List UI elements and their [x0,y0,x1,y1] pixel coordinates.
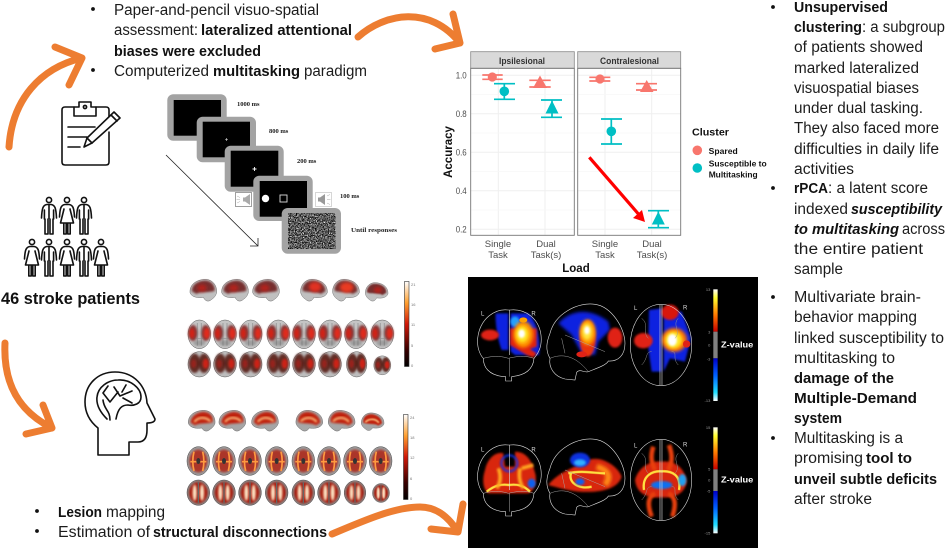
text block: brain-behaviour findings: unveil subtle deficits [794,471,937,488]
brain map: lesion Z-values [478,287,754,403]
view labels [481,305,688,317]
Z-value colour bar: -3 [707,356,711,361]
stimulus frame 1 [167,94,227,141]
text block: clustering and rPCA findings: clustering [794,19,862,36]
diagram: multitasking paradigm [166,94,397,254]
view labels [481,443,688,453]
colour bar: 5 [411,343,414,348]
y-axis ticks: 0.2 [456,224,467,236]
arrow: assessment to behavioural results [358,14,460,49]
view labels: R [531,311,536,317]
text block: brain-behaviour findings: linked susceptibility to [794,330,944,347]
text block: clustering and rPCA findings: : a latent score [828,180,928,197]
view labels: R [531,447,536,453]
y-axis ticks [456,70,467,236]
view labels: R [683,305,688,311]
x-axis ticks: Task(s) [531,250,561,261]
stimulus frame 5: noise mask [282,208,341,254]
arrow: patients to lesion mapping [5,343,52,434]
text block: brain-behaviour findings: multitasking to [794,350,895,367]
text block: clustering and rPCA findings: across [902,221,945,238]
text block: behavioural assessment bullets [91,2,367,80]
brain map: disconnection Z-values [478,425,754,536]
x-axis ticks: Task [595,250,615,261]
text block: clustering and rPCA findings: difficulties in daily life [794,141,939,158]
colour bar: 11 [411,322,416,327]
sagittal and axial slices [187,410,392,505]
view labels: L [634,306,638,312]
colour bar: 0 [410,496,413,501]
stimulus frame 3 [225,146,284,192]
panel headers [471,52,681,68]
colour bar: 21 [411,282,416,287]
icon: head with brain [85,372,155,455]
Z-value colour bar: 0 [708,343,711,348]
y-axis ticks: 0.8 [456,109,467,120]
timing labels: 100 ms [340,193,360,200]
text block: behavioural assessment bullets: Computerized [114,63,209,80]
x-axis ticks: Dual [642,239,662,250]
colour bar: 18 [410,435,415,440]
icon: speaker right [316,192,332,206]
axis titles [443,126,590,275]
text block: clustering and rPCA findings: indexed [794,201,848,218]
Z-value colour bar: Z-value [721,340,754,350]
timing labels: 800 ms [269,128,289,135]
arrow: patients to assessment [9,47,82,147]
y-axis ticks: 0.4 [456,186,467,197]
Z-value colour bar: Z-value [721,475,754,485]
icon: speaker left [236,192,252,206]
text block: brain-behaviour findings [771,289,944,508]
text block: brain-behaviour findings: tool to [866,450,912,467]
text block: brain-behaviour findings: Multitasking is a [794,430,903,447]
coronal, sagittal and axial activations [481,305,691,372]
x-axis ticks: Task [488,250,508,261]
chart: accuracy by load and cluster [443,52,767,275]
text block: behavioural assessment bullets: Paper-and-pencil visuo-spatial [114,2,319,19]
colour bar: 6 [410,476,413,481]
Z-value colour bar [705,425,754,536]
text block: lesion mapping bullets: structural disconnections [153,524,327,541]
text block: clustering and rPCA findings: rPCA [794,180,828,197]
legend: Multitasking [709,170,758,180]
text block: clustering and rPCA findings: susceptibility [851,201,943,218]
Z-value colour bar: -5 [707,488,711,493]
view labels: R [683,443,688,449]
text block: lesion mapping bullets: mapping [106,504,165,521]
axis titles: Accuracy [443,126,455,178]
text block: behavioural assessment bullets: multitasking [213,63,300,80]
view labels: L [481,311,485,317]
timing labels: Until responses [351,227,397,234]
brain maps: lesion overlap [188,279,416,377]
text block: clustering and rPCA findings: to multitasking [794,221,900,238]
text block: clustering and rPCA findings: activities [794,161,854,178]
text block: brain-behaviour findings: Multiple-Demand [794,390,917,407]
x-axis ticks: Dual [536,239,556,250]
stimulus frame 2 [197,117,256,162]
text block: brain-behaviour findings: damage of the [794,370,894,387]
x-axis ticks: Single [485,239,511,250]
colour bar [404,282,416,368]
legend [692,127,767,180]
y-axis ticks: 1.0 [456,70,467,82]
text block: clustering and rPCA findings: under dual tasking. [794,100,923,117]
text block: brain-behaviour findings: after stroke [794,491,872,508]
text block: lesion mapping bullets [35,504,327,541]
text block: behavioural assessment bullets: paradigm [304,63,367,80]
stimulus frame 4 [253,176,313,221]
series: susceptible to multitasking [494,84,669,228]
axis titles: Load [562,263,590,275]
brain maps: structural disconnection [187,410,415,505]
series: spared [482,72,657,92]
arrow: red decline [589,157,645,222]
text block: clustering and rPCA findings: visuospatial biases [794,80,919,97]
Z-value colour bar: 13 [706,287,711,292]
x-axis ticks: Task(s) [637,250,667,261]
text block: clustering and rPCA findings: the entire patient [794,241,924,258]
text block: clustering and rPCA findings: of patients showed [794,39,923,56]
text block: behavioural assessment bullets: assessment: [114,22,198,39]
text block: clustering and rPCA findings: They also faced more [794,120,939,137]
icon: group of patients [24,197,108,276]
Z-value colour bar: -13 [705,398,711,403]
text block: clustering and rPCA findings: sample [794,261,843,278]
timing labels: 1000 ms [237,101,260,108]
view labels: L [481,447,485,453]
text block: lesion mapping bullets: Lesion [58,504,102,521]
coronal, sagittal and axial tracts [483,445,687,517]
icon: clipboard and pencil [62,102,120,165]
panel headers: Contralesional [600,56,659,67]
Z-value colour bar: 0 [708,478,711,483]
text block: clustering and rPCA findings: marked lateralized [794,60,919,77]
text block: brain-behaviour findings: Multivariate brain- [794,289,921,306]
heading: sample size: 46 stroke patients [1,289,140,308]
text block: behavioural assessment bullets: lateralized attentional [201,22,352,39]
legend: Susceptible to [709,159,767,169]
y-axis ticks: 0.6 [456,148,467,158]
text block: clustering and rPCA findings [771,0,945,278]
Z-value colour bar: -15 [705,531,711,536]
arrow: disconnections to brain-behaviour maps [332,504,463,534]
colour bar: 16 [411,302,416,307]
colour bar [404,414,415,501]
Z-value colour bar: 5 [708,467,711,472]
Z-value colour bar: 15 [706,425,711,430]
text block: brain-behaviour findings: promising [794,450,863,467]
view labels: L [634,443,638,449]
text block: behavioural assessment bullets: biases were excluded [114,43,261,60]
legend: Cluster [692,127,729,139]
colour bar: 12 [410,455,415,460]
colour bar: 0 [411,363,414,368]
x-axis ticks [485,239,667,261]
panel headers: Ipsilesional [499,56,545,67]
text block: brain-behaviour findings: system [794,410,842,427]
legend: Spared [709,146,738,156]
Z-value colour bar [705,287,754,403]
text block: lesion mapping bullets: Estimation of [58,524,151,541]
panel: multivariate mapping results [468,277,758,548]
sagittal and axial slices [188,279,394,377]
timing labels [237,101,397,234]
Z-value colour bar: 3 [708,330,711,335]
text block: brain-behaviour findings: behavior mapping [794,309,917,326]
colour bar: 24 [410,415,415,420]
text block: clustering and rPCA findings: : a subgroup [862,19,945,36]
timing labels: 200 ms [297,158,317,165]
x-axis ticks: Single [592,239,618,250]
arrow: time [166,155,258,246]
